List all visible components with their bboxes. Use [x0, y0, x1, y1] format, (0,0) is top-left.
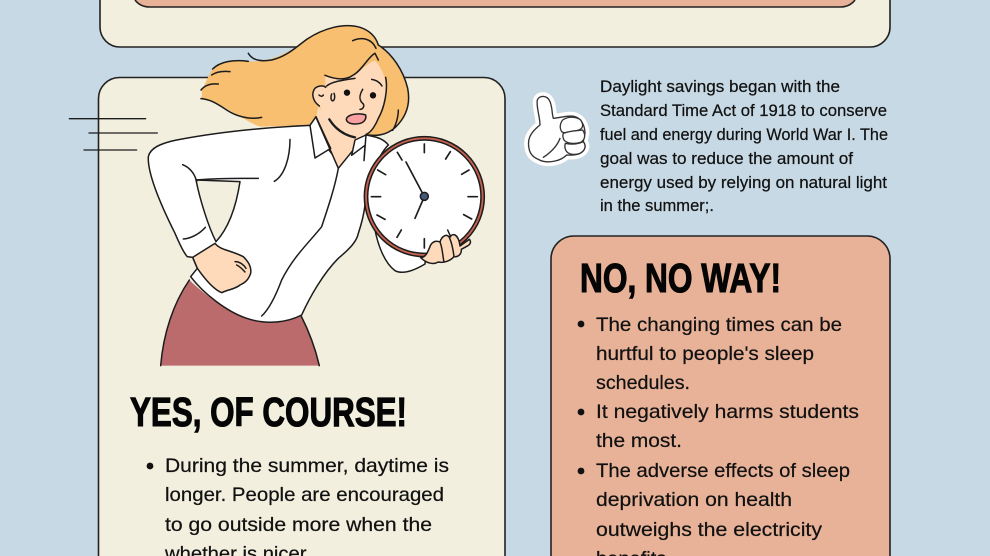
text: history paragraph: goal was to reduce the amount of [600, 150, 853, 168]
face [313, 53, 386, 137]
list: yes reasons: During the summer, daytime is [165, 455, 449, 477]
neck and collar [310, 107, 366, 168]
list: no reasons: deprivation on health [596, 489, 792, 511]
shirt back sleeve [375, 230, 427, 272]
list: no reasons: hurtful to people's sleep [596, 343, 814, 365]
cream gap between arm and torso [196, 180, 240, 242]
text: history paragraph: in the summer;. [600, 197, 714, 215]
text: history paragraph: fuel and energy during World War I. The [600, 126, 888, 144]
list: yes reasons: longer. People are encouraged [165, 484, 444, 506]
heading: no: NO, NO WAY! [580, 255, 781, 301]
text: history paragraph [600, 78, 888, 215]
hair [201, 26, 409, 135]
motion lines [69, 119, 157, 150]
panel: top cream card [100, 0, 890, 47]
list: no reasons: outweighs the electricity [596, 519, 822, 541]
icon: thumbs up [528, 96, 585, 162]
list: yes reasons: to go outside more when the [165, 514, 432, 536]
list: no reasons: The changing times can be [596, 314, 842, 336]
list: yes reasons [147, 455, 449, 556]
list: no reasons: The adverse effects of sleep [596, 460, 850, 482]
list: no reasons: schedules. [596, 372, 690, 394]
panel: no card [551, 236, 890, 556]
list: no reasons: It negatively harms students [596, 401, 859, 423]
clock hands [406, 162, 424, 218]
heading: yes: YES, OF COURSE! [130, 389, 407, 435]
curled fingers [560, 117, 583, 133]
panel: top salmon inset [135, 0, 855, 7]
illustration: woman running with clock [69, 26, 484, 366]
text: history paragraph: energy used by relying on natural light [600, 174, 887, 192]
clock [364, 137, 484, 257]
list: no reasons [578, 314, 859, 556]
fist [193, 243, 251, 293]
thumb drawing [528, 96, 585, 162]
skirt [161, 280, 319, 366]
thumb sticker outline [528, 96, 585, 162]
panel: yes card [98, 78, 505, 556]
mouth [346, 114, 366, 124]
text: history paragraph: Standard Time Act of 1918 to conserve [600, 102, 887, 120]
hand holding clock [421, 230, 470, 263]
list: no reasons: the most. [596, 430, 682, 452]
text: history paragraph: Daylight savings began with the [600, 78, 840, 96]
shirt [148, 125, 388, 322]
